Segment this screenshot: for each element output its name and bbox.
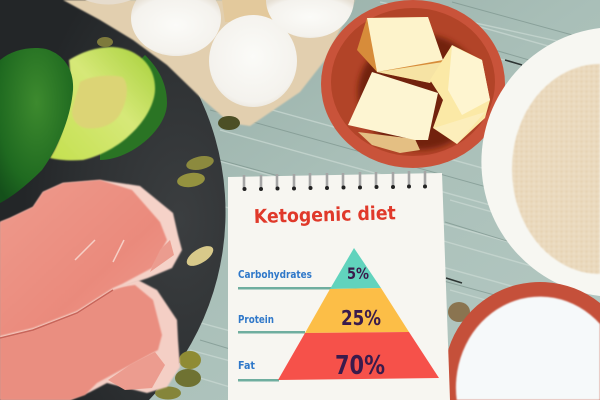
eggs [85,0,354,107]
pumpkin seeds on board [97,37,470,400]
meat: lower pork chop [0,280,180,400]
avocado skin half [0,48,73,203]
spiral binding [242,171,427,191]
notebook page [228,171,450,400]
pyramid chart [278,248,439,381]
slate board [0,0,226,400]
segment: carbohydrates 5%: 5% [347,264,369,283]
label: carbohydrates: Carbohydrates [238,269,312,281]
segment: fat 70%: 70% [335,351,385,381]
label: carbohydrates [238,269,331,290]
label: protein: Protein [238,314,274,326]
avocado half with pit cavity [50,47,167,160]
segment: fat 70% [278,332,439,381]
terracotta bowl with coconut oil [444,282,600,400]
segment: carbohydrates 5% [330,248,381,289]
segment: protein 25%: 25% [341,306,381,330]
title: Ketogenic diet [254,202,396,228]
label: fat [238,360,279,382]
label: fat: Fat [238,360,255,372]
segment: protein 25% [305,288,409,333]
meat: upper pork chop [0,180,182,338]
egg carton [63,0,355,126]
butter pieces [348,17,490,153]
label: protein [238,314,305,334]
terracotta bowl with butter [321,0,505,168]
white plate with almond flour [481,28,600,296]
